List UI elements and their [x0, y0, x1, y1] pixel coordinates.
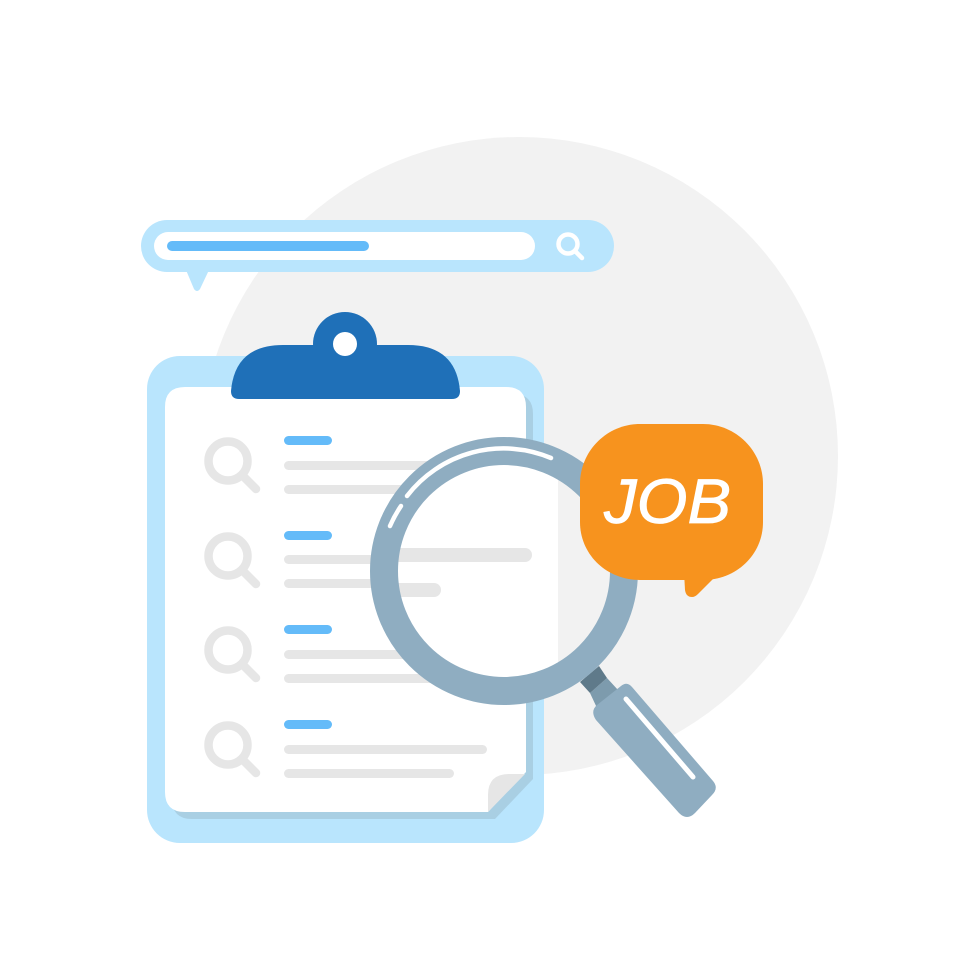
- row 2 title: [284, 531, 332, 540]
- search bar tail: [186, 270, 209, 291]
- glass neck light: [590, 678, 618, 708]
- icon: row 2 magnifier: [208, 536, 256, 584]
- paper shadow: [172, 394, 533, 819]
- row 3 line 2: [284, 674, 454, 683]
- magnified line 2: [398, 583, 441, 597]
- illustration: job search: [141, 137, 838, 843]
- icon: row 1 magnifier: [208, 442, 256, 489]
- paper sheet: [165, 387, 526, 812]
- search input field: [154, 232, 535, 260]
- row 3 line 1: [284, 650, 487, 659]
- row 2 line 2: [284, 579, 454, 588]
- search bar: [141, 220, 614, 291]
- ring highlight short: [390, 506, 401, 526]
- row 4 title: [284, 720, 332, 729]
- row 2 line 1: [284, 555, 487, 564]
- icon: search button magnifier: [558, 234, 582, 258]
- row 1 title: [284, 436, 332, 445]
- paper fold corner: [488, 774, 525, 812]
- ring highlight long: [407, 448, 551, 496]
- row 1 line 2: [284, 485, 454, 494]
- search bar body: [141, 220, 614, 272]
- icon: row 4 magnifier: [208, 726, 256, 773]
- lens ring: [384, 451, 624, 691]
- lens background area: [558, 460, 618, 685]
- lens white area: [398, 466, 558, 674]
- handle highlight: [626, 699, 693, 777]
- glass handle: [593, 684, 716, 817]
- clip body: [231, 345, 460, 399]
- list row 2: [208, 531, 487, 588]
- magnified line 1: [398, 548, 532, 562]
- bubble tail: [684, 572, 716, 597]
- clipboard clip: [231, 312, 460, 399]
- glass neck dark: [580, 666, 607, 693]
- list row 3: [208, 625, 487, 683]
- list row 1: [208, 436, 487, 494]
- search query line: [167, 241, 369, 251]
- magnifying glass: [380, 448, 716, 817]
- job label: JOB: [603, 467, 731, 537]
- row 3 title: [284, 625, 332, 634]
- row 4 line 2: [284, 769, 454, 778]
- list row 4: [208, 720, 487, 778]
- clip lobe: [313, 312, 377, 376]
- bubble body: [580, 424, 763, 580]
- row 4 line 1: [284, 745, 487, 754]
- icon: row 3 magnifier: [208, 630, 256, 678]
- clip hole: [333, 332, 357, 356]
- clipboard: [147, 312, 544, 843]
- clipboard board: [147, 356, 544, 843]
- lens interior: [398, 466, 558, 674]
- job speech bubble: [580, 424, 763, 597]
- background circle: [200, 137, 838, 775]
- row 1 line 1: [284, 461, 487, 470]
